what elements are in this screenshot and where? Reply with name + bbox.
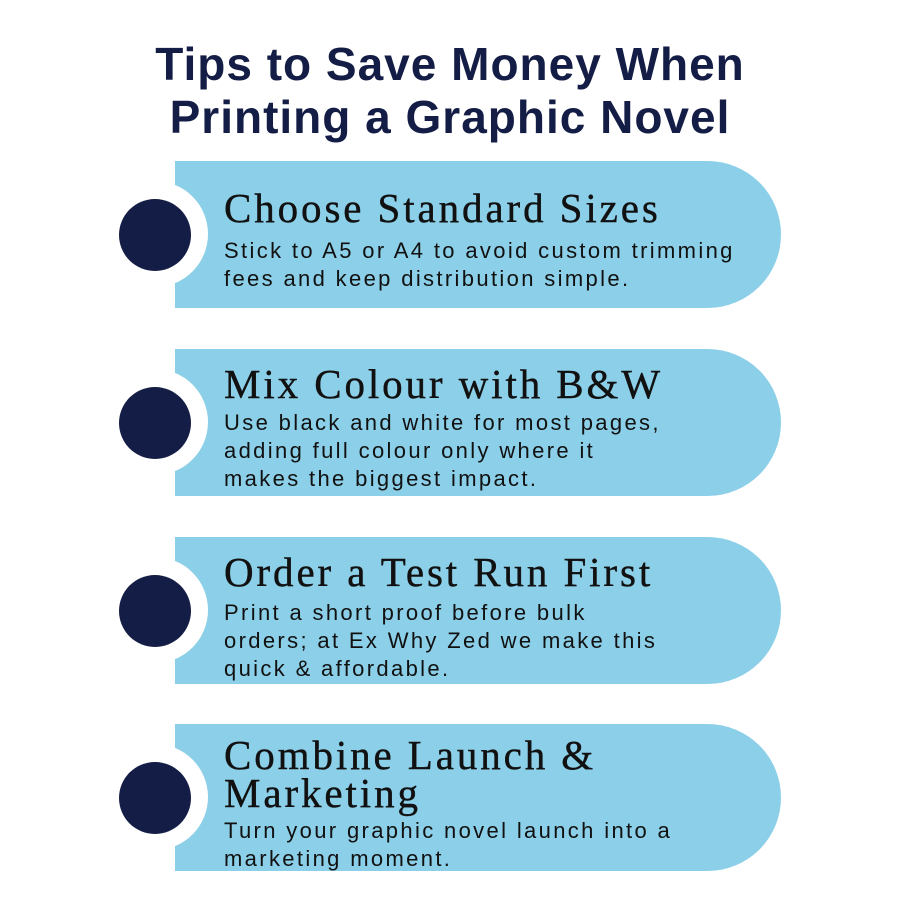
panel: standard sizes [175, 161, 781, 308]
icon: dot [119, 762, 191, 834]
text: adding full colour only where it [224, 438, 595, 463]
panel: test run [175, 537, 781, 684]
text: Print a short proof before bulk [224, 600, 587, 625]
heading: Choose Standard Sizes [224, 185, 661, 231]
icon: dot [119, 575, 191, 647]
text: quick & affordable. [224, 656, 450, 681]
title [155, 38, 745, 143]
text [224, 410, 661, 491]
heading: Marketing [224, 770, 421, 816]
heading: Combine Launch & [224, 732, 596, 778]
text [224, 238, 735, 291]
text [224, 600, 657, 681]
title: Printing a Graphic Novel [170, 91, 730, 143]
title: Tips to Save Money When [155, 38, 745, 90]
text: Turn your graphic novel launch into a [224, 818, 672, 843]
text: Stick to A5 or A4 to avoid custom trimming [224, 238, 735, 263]
heading: Order a Test Run First [224, 549, 653, 595]
icon: notch [102, 744, 208, 850]
icon: notch [102, 557, 208, 663]
text: fees and keep distribution simple. [224, 266, 630, 291]
icon: dot [119, 387, 191, 459]
heading: Mix Colour with B&W [224, 361, 663, 407]
icon: notch [102, 369, 208, 475]
text: orders; at Ex Why Zed we make this [224, 628, 657, 653]
text: marketing moment. [224, 846, 452, 871]
text [224, 818, 672, 871]
icon: dot [119, 199, 191, 271]
icon: notch [102, 181, 208, 287]
text: Use black and white for most pages, [224, 410, 661, 435]
panel: colour [175, 349, 781, 496]
heading [224, 732, 596, 816]
text: makes the biggest impact. [224, 466, 538, 491]
panel: launch [175, 724, 781, 871]
